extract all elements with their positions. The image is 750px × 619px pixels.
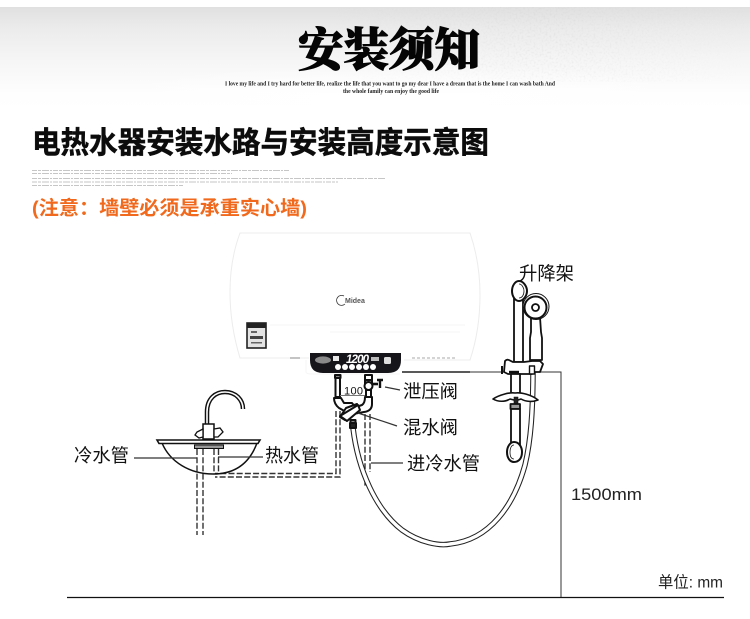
faucet base [203, 424, 214, 439]
fine print lines [32, 170, 386, 186]
faucet spout [207, 392, 243, 424]
notice: load-bearing wall: (注意：墙壁必须是承重实心墙) [32, 196, 307, 220]
water heater [230, 233, 480, 374]
diagram labels [74, 260, 574, 476]
unit note: 单位: mm [658, 574, 723, 592]
rating sticker [247, 323, 266, 348]
brand logo: Midea [345, 298, 365, 305]
drain plate [493, 393, 538, 401]
label: mixing valve: 混水阀 [403, 414, 458, 440]
control panel [310, 353, 401, 373]
section heading: 电热水器安装水路与安装高度示意图 [32, 127, 489, 160]
100 mm spacing label: 100 [344, 386, 363, 398]
title: 安装须知 [298, 14, 480, 80]
header background band [0, 7, 750, 82]
basin bowl [162, 443, 257, 474]
top grip [512, 281, 527, 301]
U-bends [334, 398, 356, 413]
wash basin and faucet [157, 392, 260, 474]
mixer body [340, 404, 357, 420]
left inlet [336, 375, 340, 397]
basin rim [157, 440, 260, 444]
height dimension label: 1500mm [571, 485, 642, 504]
rail rod [514, 298, 523, 362]
lower grip [510, 404, 520, 409]
leader lines [134, 387, 403, 463]
subtitle: I love my life and I try hard for better life, realize the life that you want to go my dear I have a dream that is the home I can wash bath And [225, 80, 555, 88]
dashed concealed pipes [197, 411, 370, 535]
bracket [504, 360, 543, 374]
brand logo [337, 295, 365, 305]
shower head [523, 294, 549, 320]
label: relief valve: 泄压阀 [403, 378, 458, 404]
right inlet and pressure valve [365, 375, 372, 380]
shower rail [493, 281, 549, 462]
wall and height dimension lines [67, 372, 724, 598]
label: cold inlet pipe: 进冷水管 [407, 450, 480, 476]
lower rod [511, 374, 520, 396]
subtitle: the whole family can enjoy the good life [343, 88, 439, 95]
flexible hose [353, 368, 533, 545]
heater body [230, 233, 480, 360]
shower handle [530, 317, 542, 360]
label: hot water pipe: 热水管 [265, 442, 319, 468]
label: cold water pipe: 冷水管 [74, 442, 129, 468]
basin plate [194, 445, 224, 448]
100 spacing line [340, 394, 365, 396]
label: lift rail: 升降架 [519, 260, 574, 286]
control panel: 1200 [346, 354, 370, 366]
mixing valve pipework [334, 375, 383, 428]
faint body details [270, 325, 465, 374]
subtitle [225, 80, 555, 95]
